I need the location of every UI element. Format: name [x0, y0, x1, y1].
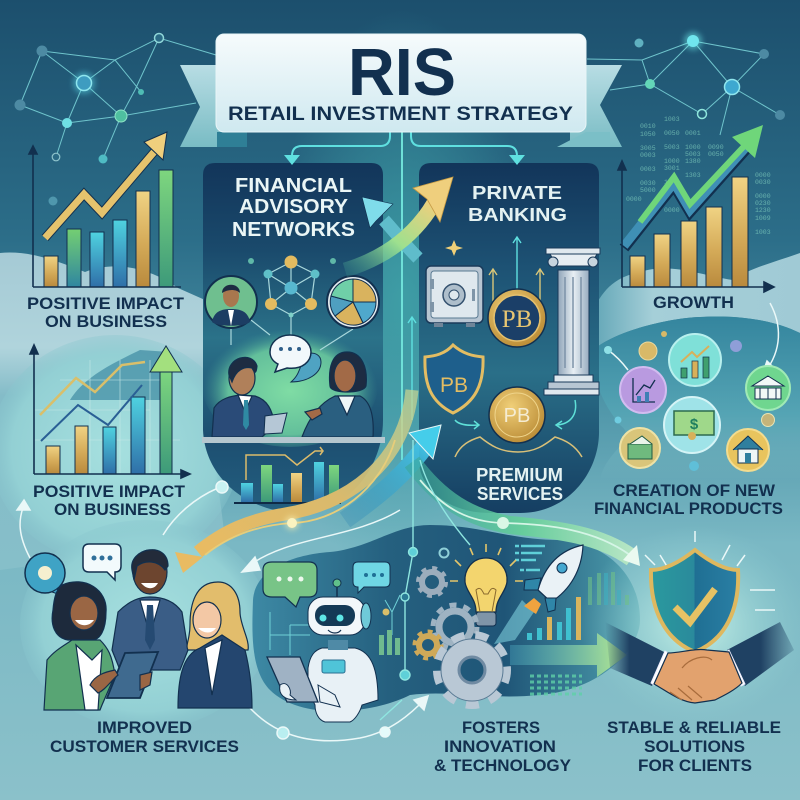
- label: stable and reliable solutions for clients: [607, 719, 781, 775]
- icon: data list: [515, 546, 545, 570]
- binary data backdrop: 1003: [755, 229, 771, 236]
- label: premium services: [476, 465, 563, 504]
- icon: rocket: [494, 545, 583, 644]
- icon: PB coin: PB: [502, 306, 532, 333]
- blond woman: [178, 582, 252, 708]
- binary data backdrop: 0030: [755, 179, 771, 186]
- label: stable and reliable solutions for clients: SOLUTIONS: [644, 738, 745, 756]
- heading: financial advisory networks: ADVISORY: [239, 196, 349, 218]
- subtitle text: RETAIL INVESTMENT STRATEGY: [228, 104, 573, 125]
- binary data backdrop: 0003: [640, 166, 656, 173]
- label: fosters innovation and technology: FOSTERS: [462, 719, 540, 737]
- label: stable and reliable solutions for clients: STABLE & RELIABLE: [607, 719, 781, 737]
- binary data backdrop: 0000: [664, 207, 680, 214]
- small bar chart: [234, 447, 341, 503]
- binary data backdrop: 1000: [685, 144, 701, 151]
- bubble: contract: [620, 428, 660, 468]
- label: premium services: SERVICES: [477, 484, 563, 504]
- bubble: money: [664, 397, 720, 453]
- gold brackets: [455, 437, 582, 457]
- advisor man: [212, 357, 275, 437]
- binary data backdrop: 1000: [664, 158, 680, 165]
- body: [308, 648, 378, 722]
- binary data backdrop: 5003: [685, 151, 701, 158]
- circuit connector with nodes: [380, 440, 470, 720]
- head: [308, 597, 365, 635]
- left light blob behind lower chart: [0, 335, 240, 565]
- label: fosters innovation and technology: INNOVATION: [444, 738, 556, 756]
- label: positive impact top: [27, 295, 184, 331]
- green spotlight behind advisors: [202, 323, 378, 447]
- network connector icon: [231, 256, 353, 350]
- ribbon left: [180, 65, 230, 147]
- lower innovation and robot blob: [252, 525, 640, 711]
- big arrow to handshake: [510, 633, 627, 677]
- small cycle arrows: [455, 400, 576, 429]
- binary data backdrop: 1303: [685, 172, 701, 179]
- label: stable and reliable solutions for clients: FOR CLIENTS: [638, 757, 752, 775]
- shield glow: [580, 525, 800, 725]
- arrow: cyan to advisory: [362, 197, 418, 258]
- title banner: [180, 34, 622, 147]
- binary data backdrop: 1003: [664, 116, 680, 123]
- side data lines: [270, 595, 400, 655]
- avatar: advisor: [205, 276, 257, 328]
- binary data backdrop: 0050: [708, 151, 724, 158]
- speech bubble: [83, 544, 121, 580]
- binary data backdrop: 3001: [664, 165, 680, 172]
- people light blob: [20, 520, 270, 730]
- gears: [414, 568, 507, 705]
- icon: PB shield: PB: [440, 374, 468, 397]
- binary data backdrop: 0230: [755, 200, 771, 207]
- heading: financial advisory networks: FINANCIAL: [235, 175, 352, 197]
- icon: lightbulb: [450, 544, 523, 626]
- heading: private banking: PRIVATE: [472, 183, 562, 203]
- arrow: title to financial advisory: [284, 130, 390, 165]
- rays: [645, 531, 775, 610]
- panel: private banking: [408, 163, 600, 513]
- network: top right: [587, 32, 785, 135]
- advisor woman: [302, 352, 373, 437]
- tablet: [267, 657, 318, 702]
- desk: [202, 437, 385, 443]
- binary data backdrop: 0000: [626, 196, 642, 203]
- title text: RIS: [348, 35, 456, 110]
- binary data backdrop: 0000: [755, 193, 771, 200]
- binary data backdrop: 3005: [640, 145, 656, 152]
- binary data backdrop: 1050: [640, 131, 656, 138]
- flow: green to stable solutions: [412, 462, 640, 566]
- ribbon right fold: [557, 132, 610, 147]
- binary data backdrop: 5003: [664, 144, 680, 151]
- ribbon right: [570, 65, 622, 147]
- right bubble backdrop: [595, 316, 800, 480]
- bubble: money: $: [690, 416, 699, 433]
- network: top left: [14, 34, 216, 206]
- binary data backdrop: 1000: [664, 179, 680, 186]
- icon: PB shield: [425, 345, 483, 413]
- bubble: bank: [746, 366, 790, 410]
- label: fosters innovation and technology: & TECHNOLOGY: [434, 757, 571, 775]
- heading: private banking: BANKING: [468, 205, 567, 225]
- label: improved customer services: [50, 719, 239, 756]
- heading: private banking: [468, 183, 567, 225]
- tablet: [264, 413, 287, 434]
- label: improved customer services: IMPROVED: [97, 719, 192, 737]
- ribbon left fold: [217, 132, 247, 147]
- rising light arrows: [408, 237, 544, 420]
- bubble: purple chart: [620, 367, 666, 413]
- label: growth: GROWTH: [653, 294, 734, 312]
- check: [675, 589, 715, 622]
- icon: lightbulb bubble: [25, 553, 65, 596]
- binary data backdrop: 0090: [708, 144, 724, 151]
- label: improved customer services: CUSTOMER SERVICES: [50, 738, 239, 756]
- binary data backdrop: 1380: [685, 158, 701, 165]
- binary data backdrop: 0030: [640, 180, 656, 187]
- bubble: house: [727, 429, 769, 471]
- decorative small bubbles: [614, 331, 774, 471]
- label: fosters innovation and technology: [434, 719, 571, 775]
- center vertical connector: [401, 132, 403, 460]
- label: positive impact top: ON BUSINESS: [45, 313, 167, 331]
- icon: PB coin: [488, 289, 546, 347]
- binary data backdrop: 1230: [755, 207, 771, 214]
- innovation graphics: [414, 544, 629, 705]
- speech bubbles: [270, 335, 321, 382]
- shield and handshake: [605, 531, 794, 703]
- icon: gold PB coin: PB: [504, 405, 530, 427]
- right arm: [727, 622, 794, 686]
- label: creation of new financial products: [594, 482, 783, 518]
- label: premium services: PREMIUM: [476, 465, 563, 485]
- mini bars: [527, 572, 629, 640]
- label: positive impact lower: POSITIVE IMPACT: [33, 483, 185, 501]
- thin arrows: [17, 303, 778, 741]
- label: positive impact top: POSITIVE IMPACT: [27, 295, 184, 313]
- arrow: gold-green rising: [345, 177, 453, 270]
- label: positive impact lower: ON BUSINESS: [54, 501, 171, 519]
- sparkle: [445, 240, 463, 256]
- binary data backdrop: 0001: [685, 130, 701, 137]
- heading: financial advisory networks: NETWORKS: [232, 219, 355, 241]
- shield: [651, 550, 738, 652]
- bubble: chart: [669, 334, 721, 386]
- icon: column: [544, 248, 600, 395]
- bubbles: financial products: [614, 331, 790, 471]
- left arm: [605, 622, 666, 686]
- cuffs: [651, 650, 745, 686]
- right cloud band: [590, 253, 800, 347]
- blue speech bubble: [353, 562, 390, 593]
- binary data backdrop: 5000: [640, 187, 656, 194]
- arrow: title to private banking: [411, 130, 525, 165]
- chart: positive impact top: [29, 132, 181, 287]
- woman in green: [44, 582, 158, 710]
- binary data backdrop: 0010: [640, 123, 656, 130]
- heading: financial advisory networks: [232, 175, 355, 241]
- data grid: [530, 676, 582, 694]
- icon: gold PB coin: [489, 387, 545, 443]
- robot: [263, 562, 400, 722]
- label: positive impact lower: [33, 483, 185, 519]
- label: creation of new financial products: CREATION OF NEW: [613, 482, 775, 500]
- binary data backdrop: 0003: [640, 152, 656, 159]
- panel: financial advisory networks: [202, 163, 385, 513]
- binary data backdrop: 0050: [664, 130, 680, 137]
- green speech bubble: [263, 562, 317, 607]
- pie chart icon: [327, 276, 379, 328]
- left cloud band: [0, 253, 225, 570]
- chart: positive impact lower: [30, 345, 190, 478]
- man: [112, 550, 188, 670]
- icon: safe: [426, 266, 483, 327]
- people: customer service team: [25, 544, 252, 710]
- binary data backdrop: [626, 116, 771, 236]
- flow: blue rising arrow: [345, 425, 441, 520]
- binary data backdrop: 0000: [755, 172, 771, 179]
- hands: [654, 650, 742, 703]
- chart: growth: [618, 125, 774, 292]
- binary data backdrop: 1009: [755, 215, 771, 222]
- label: creation of new financial products: FINANCIAL PRODUCTS: [594, 500, 783, 518]
- flow: gold to customer services: [175, 390, 412, 573]
